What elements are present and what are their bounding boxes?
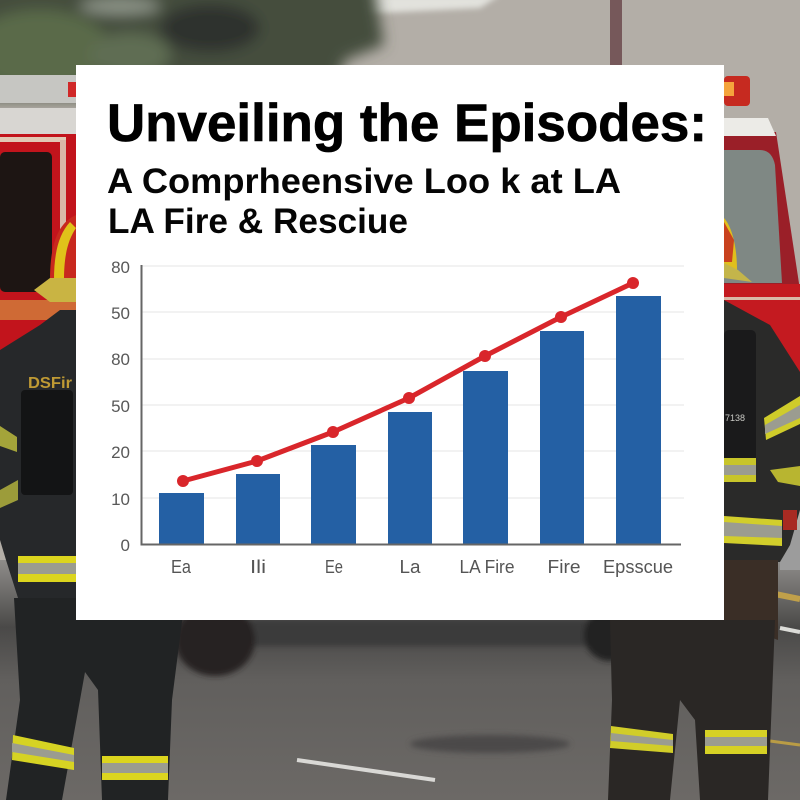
reflective stripes: right pants	[610, 726, 767, 754]
y-axis labels: 80	[111, 258, 130, 277]
helmet: right	[724, 218, 752, 282]
pants: right	[608, 620, 775, 800]
x-axis labels: Ee	[325, 557, 343, 577]
background: truck underside and wheels	[175, 604, 636, 676]
background: sky	[340, 0, 500, 14]
reflective stripes: left pants	[12, 735, 168, 780]
background: road markings	[297, 594, 800, 780]
background: left fire truck	[0, 75, 76, 350]
y-axis labels	[111, 258, 130, 555]
reflective stripes: left sleeve	[0, 426, 18, 508]
pack label: 7138	[725, 413, 745, 423]
background: building pole	[610, 0, 622, 66]
panel: white chart card	[76, 65, 724, 620]
axes	[142, 265, 681, 544]
y-axis labels: 20	[111, 443, 130, 462]
y-axis labels: 10	[111, 490, 130, 509]
jacket: right	[724, 300, 800, 562]
x-axis labels: LA Fire	[460, 557, 514, 577]
subtitle: LA Fire & Resciue	[108, 202, 408, 241]
background: road	[0, 560, 800, 800]
x-axis labels: Ili	[250, 557, 266, 577]
reflective stripes: right jacket	[724, 396, 800, 546]
pants: left	[6, 598, 185, 800]
y-axis labels: 80	[111, 350, 130, 369]
firefighter: right	[608, 218, 800, 800]
bars	[159, 296, 661, 544]
trend line	[177, 277, 639, 487]
air pack: right	[724, 330, 756, 465]
jacket text: DSFir	[28, 375, 72, 392]
jacket: left	[0, 310, 76, 598]
background: trees	[0, 0, 384, 100]
subtitle: A Comprheensive Loo k at LA	[107, 162, 621, 201]
title: Unveiling the Episodes:	[107, 94, 707, 153]
x-axis labels: Epsscue	[603, 557, 673, 577]
background: right fire truck	[724, 76, 800, 570]
x-axis labels	[171, 557, 673, 577]
x-axis labels: Ea	[171, 557, 192, 577]
subtitle	[107, 162, 621, 241]
x-axis labels: La	[400, 557, 422, 577]
x-axis labels: Fire	[548, 557, 580, 577]
y-axis labels: 50	[111, 304, 130, 323]
jacket glove	[783, 510, 797, 530]
reflective stripe: jacket hem left	[18, 556, 76, 582]
firefighter: left	[0, 215, 185, 800]
chart: episodes bar and line chart	[111, 258, 684, 577]
y-axis labels: 50	[111, 397, 130, 416]
air pack: left	[21, 390, 73, 495]
upper pants: right	[724, 560, 778, 640]
helmet: left	[34, 215, 76, 302]
y-axis labels: 0	[121, 536, 130, 555]
